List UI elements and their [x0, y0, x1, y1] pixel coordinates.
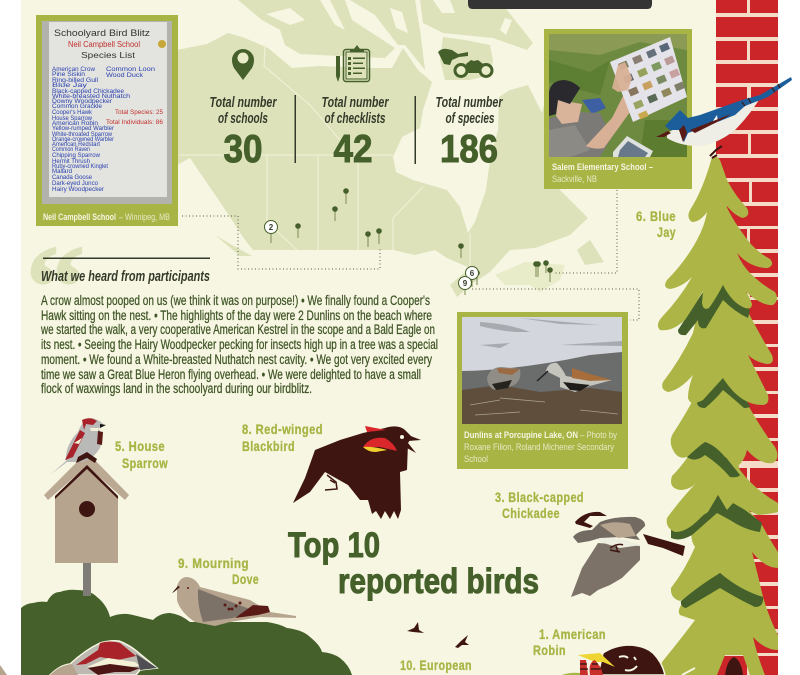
- photo card: species list: Cooper's Hawk: [52, 109, 93, 116]
- bush: [21, 590, 352, 675]
- quote body: A crow almost pooped on us (we think it was on purpose!) • We finally found a Cooper's: [41, 293, 430, 308]
- photo card: Salem Elementary School: Salem Elementary School –: [552, 162, 653, 173]
- mourning dove: [172, 577, 296, 626]
- numbered pin 9: 9: [463, 279, 468, 288]
- numbered pin 9: [458, 276, 472, 290]
- quote body: moment. • We found a White-breasted Nuthatch nest cavity. • We got very excited every: [41, 352, 432, 367]
- label: House Sparrow: Sparrow: [122, 455, 168, 471]
- stat: checklists: Total number: [322, 94, 389, 111]
- tree shadow band 5: [681, 573, 763, 608]
- tree shadow band 1: [678, 285, 750, 335]
- american robin: [562, 645, 665, 675]
- photo card: species list: Orange-crowned Warbler: [52, 136, 114, 143]
- stat: species: 186: [440, 128, 498, 171]
- photo card: species list: Schoolyard Bird Blitz: [54, 28, 151, 38]
- tree shadow band 2: [697, 375, 750, 408]
- photo card: Dunlins at Porcupine Lake: [457, 312, 628, 469]
- blue jay: [656, 77, 792, 158]
- robin tail on tree: [725, 657, 743, 675]
- photo card: species list: Chipping Sparrow: [52, 152, 101, 159]
- stat: schools: of schools: [218, 110, 268, 127]
- quotation mark: “: [26, 221, 85, 352]
- icon: clipboard and pencil: [336, 45, 370, 82]
- photo card: species list: Common Loon: [106, 66, 156, 73]
- chart title: Top 10 reported birds: Top 10: [288, 526, 380, 565]
- arctic water channels: [266, 0, 512, 66]
- photo card: Salem Elementary School: Sackville, NB: [552, 174, 597, 185]
- label: Black-capped Chickadee: Chickadee: [502, 505, 560, 521]
- numbered pin 6: 6: [470, 269, 475, 278]
- photo card: species list: Hairy Woodpecker: [52, 186, 104, 193]
- photo card: species list: [36, 15, 178, 226]
- chart title: Top 10 reported birds: [288, 526, 539, 601]
- tree shadow band 4: [671, 495, 762, 539]
- photo card: species list: White-breasted Nuthatch: [52, 93, 131, 100]
- photo card: species list: Species List: [81, 51, 136, 60]
- stat: schools: Total number: [210, 94, 277, 111]
- photo card: species list: Common Grackle: [52, 103, 103, 110]
- label: Blue Jay: [636, 208, 676, 240]
- photo card: species list: Hermit Thrush: [52, 158, 91, 165]
- photo: right dunlin: [537, 363, 612, 392]
- photo card: species list: Neil Campbell School: [43, 212, 116, 223]
- numbered pin 2: 2: [269, 223, 274, 232]
- house sparrow: [50, 418, 106, 475]
- numbered pin 6: [466, 266, 478, 280]
- stat: schools: [210, 49, 277, 171]
- stat: checklists: [322, 45, 389, 171]
- label: House Sparrow: 5. House: [115, 438, 165, 454]
- photo card: species list: Yellow-rumped Warbler: [52, 125, 114, 132]
- map of Canada: [177, 0, 604, 297]
- quote body: Hawk sitting on the nest. • The highlights of the day were 2 Dunlins on the beach where: [41, 308, 432, 323]
- chipping sparrow: [50, 641, 157, 675]
- photo card: species list: White-throated Sparrow: [52, 131, 112, 138]
- numbered pin 2: [264, 220, 278, 234]
- photo card: species list: Downy Woodpecker: [52, 98, 112, 105]
- photo card: species list: Black-capped Chickadee: [52, 88, 125, 95]
- photo card: species list: Ruby-crowned Kinglet: [52, 163, 108, 170]
- photo card: species list: Total Individuals: 86: [106, 119, 163, 126]
- quote body: time we saw a Great Blue Heron flying overhead. • We were delighted to have a small: [41, 367, 421, 382]
- tree shadow band 3: [687, 441, 740, 477]
- stat: species: of species: [446, 110, 494, 127]
- photo card: species list: Total Species: 25: [115, 109, 163, 116]
- quote body: flock of waxwings land in the schoolyard during our birdblitz.: [41, 381, 312, 396]
- stat: schools: 30: [224, 128, 262, 171]
- quote body: its nest. • Seeing the Hairy Woodpecker pecking for insects high up in a tree was a special: [41, 337, 438, 352]
- label: Black-capped Chickadee: [495, 489, 584, 521]
- label: Mourning Dove: [178, 555, 259, 587]
- photo card: Dunlins at Porcupine Lake: Dunlins at Porcupine Lake, ON: [464, 430, 578, 441]
- label: House Sparrow: [115, 438, 168, 471]
- photo card: species list: American Crow: [52, 66, 96, 73]
- stat: checklists: of checklists: [324, 110, 386, 127]
- photo: left dunlin: [487, 367, 520, 390]
- photo card: species list: House Sparrow: [52, 115, 92, 122]
- label: Blue Jay: 6. Blue: [636, 208, 676, 224]
- quote section: [26, 221, 438, 396]
- photo card: Dunlins at Porcupine Lake: – Photo by: [580, 430, 617, 441]
- pine tree: [658, 156, 778, 675]
- label: American Robin: 1. American: [539, 626, 606, 642]
- photo card: species list: Wood Duck: [106, 72, 144, 79]
- label: Black-capped Chickadee: 3. Black-capped: [495, 489, 584, 505]
- photo card: species list: Ring-billed Gull: [52, 77, 98, 84]
- photo card: species list: Dark-eyed Junco: [52, 180, 99, 187]
- photo card: Dunlins at Porcupine Lake: Roxane Filion, Roland Michener Secondary: [464, 442, 614, 453]
- stat: species: [436, 49, 503, 171]
- map pins: [270, 188, 553, 295]
- photo card: species list: Neil Campbell School: [68, 40, 140, 49]
- label: Red-winged Blackbird: [242, 421, 323, 454]
- label: American Robin: [533, 626, 606, 658]
- icon: bird and binoculars: [438, 49, 494, 78]
- photo card: species list: Common Raven: [52, 146, 90, 153]
- photo card: species list: American Robin: [52, 120, 99, 127]
- label: Red-winged Blackbird: 8. Red-winged: [242, 421, 323, 437]
- photo card: species list: – Winnipeg, MB: [119, 212, 170, 223]
- dotted connector lines: [182, 190, 639, 320]
- dark header tab: [468, 0, 652, 9]
- label: Red-winged Blackbird: Blackbird: [242, 438, 295, 454]
- stat dividers: [294, 95, 416, 164]
- photo card: species list: Canada Goose: [52, 174, 93, 181]
- photo card: Salem Elementary School: [544, 29, 692, 189]
- label: Mourning Dove: 9. Mourning: [178, 555, 249, 571]
- stat: species: Total number: [436, 94, 503, 111]
- label: Mourning Dove: Dove: [232, 571, 259, 587]
- province borders: [180, 45, 470, 280]
- european starlings: [407, 622, 469, 648]
- chart title: Top 10 reported birds: reported birds: [338, 562, 539, 601]
- label: American Robin: Robin: [533, 642, 566, 658]
- quote body: we started the walk, a very cooperative American Kestrel in the scope and a Bald Eagle on: [40, 322, 435, 337]
- tree slash highlight: [682, 668, 695, 675]
- brick wall: [716, 0, 778, 675]
- red-winged blackbird: [293, 426, 421, 519]
- photo card: Dunlins at Porcupine Lake: School: [464, 454, 488, 465]
- label: European Starling: 10. European: [400, 657, 472, 673]
- photo card: species list: Blue Jay: [52, 82, 88, 89]
- birdhouse: [44, 452, 129, 596]
- label: Blue Jay: Jay: [657, 224, 676, 240]
- black-capped chickadee: [571, 512, 685, 597]
- photo card: species list: Mallard: [52, 168, 73, 175]
- quote heading: What we heard from participants: [41, 268, 210, 285]
- photo card: species list: American Redstart: [52, 141, 100, 148]
- quote body: [40, 293, 438, 396]
- photo card: species list: Pine Siskin: [52, 71, 86, 78]
- icon: map pin: [232, 49, 254, 80]
- stat: checklists: 42: [334, 128, 372, 171]
